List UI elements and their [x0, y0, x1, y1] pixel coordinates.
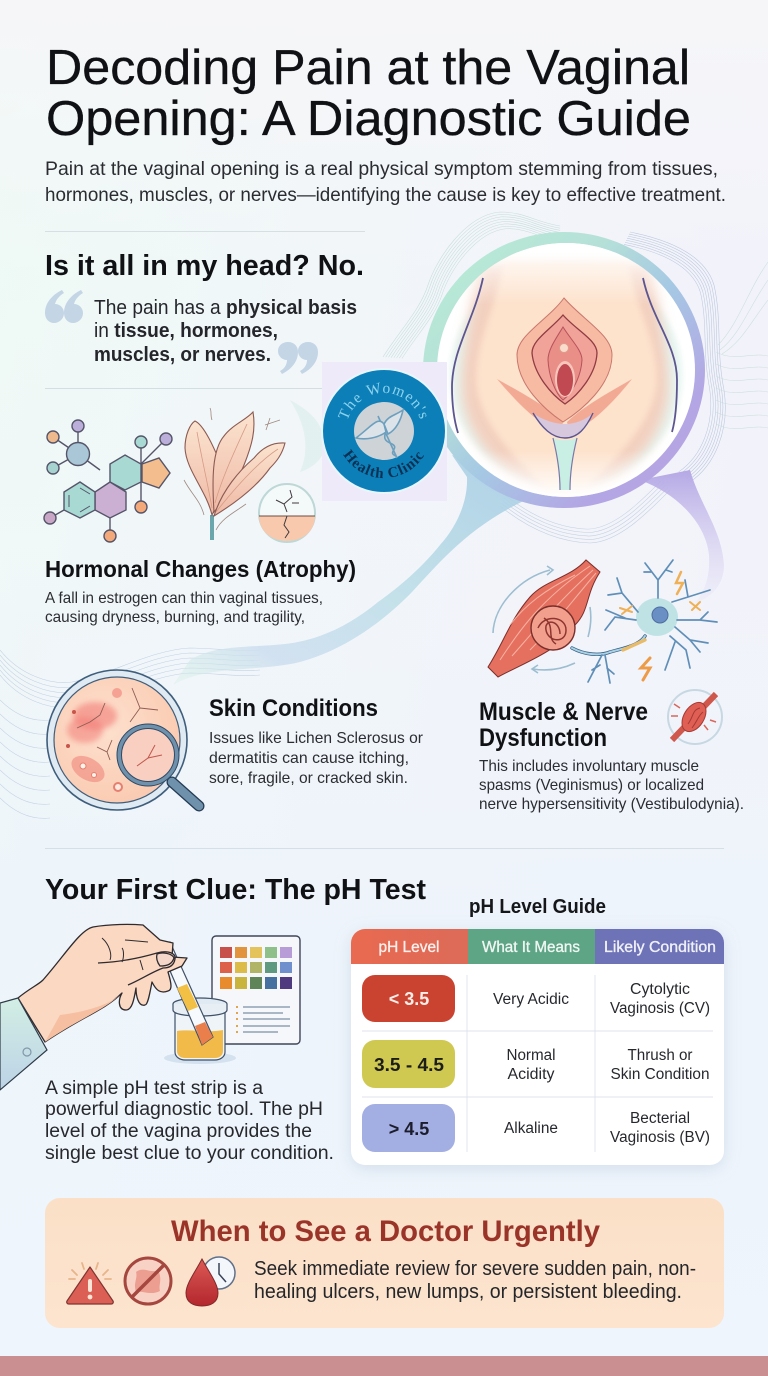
table header: What It Means: [482, 939, 580, 956]
row: below 3.5: Cytolytic: [630, 981, 690, 998]
row: 3.5 to 4.5: Skin Condition: [610, 1066, 710, 1083]
description: Issues like Lichen Sclerosus or: [209, 730, 424, 747]
row: 3.5 to 4.5: 3.5 - 4.5: [374, 1055, 444, 1075]
intro text: [45, 158, 726, 206]
logo wordmark: [338, 382, 426, 478]
icon: colour reference chart: [212, 936, 300, 1044]
description: nerve hypersensitivity (Vestibulodynia).: [479, 796, 744, 813]
description: [479, 758, 744, 813]
icon: shirt cuff: [0, 998, 47, 1090]
row: below 3.5: Vaginosis (CV): [610, 1000, 710, 1017]
title: Opening: A Diagnostic Guide: [46, 92, 691, 146]
description: [45, 590, 323, 626]
heading: [479, 698, 648, 752]
icon: wilted flower: [184, 408, 285, 540]
ph description: powerful diagnostic tool. The pH: [45, 1099, 323, 1120]
quote block: [45, 290, 357, 374]
description: dermatitis can cause itching,: [209, 750, 409, 767]
skin conditions panel: [47, 670, 424, 810]
row: 3.5 to 4.5: [362, 1040, 710, 1088]
heading: Hormonal Changes (Atrophy): [45, 556, 356, 582]
intro text: hormones, muscles, or nerves—identifying the cause is key to effective treatment.: [45, 184, 726, 206]
intro text: Pain at the vaginal opening is a real physical symptom stemming from tissues,: [45, 158, 718, 180]
ph description: single best clue to your condition.: [45, 1143, 334, 1164]
heading: is it all in my head: Is it all in my head? No.: [45, 250, 364, 282]
row: 3.5 to 4.5: Normal: [506, 1047, 556, 1064]
row: below 3.5: [362, 975, 710, 1022]
title: Decoding Pain at the Vaginal: [46, 41, 690, 95]
heading: Skin Conditions: [209, 695, 378, 722]
row: below 3.5: Very Acidic: [493, 991, 569, 1008]
callout text: Seek immediate review for severe sudden pain, non-: [254, 1258, 696, 1280]
row: above 4.5: Alkaline: [504, 1120, 558, 1137]
footer bar: [0, 1356, 768, 1376]
flowing contour lines: [0, 212, 768, 818]
heading: ph test: Your First Clue: The pH Test: [45, 874, 426, 906]
callout heading: When to See a Doctor Urgently: [171, 1215, 600, 1248]
heading: Muscle & Nerve: [479, 698, 648, 726]
table header: [351, 929, 724, 964]
ph table title: pH Level Guide: [469, 896, 606, 918]
callout text: [254, 1258, 696, 1303]
description: This includes involuntary muscle: [479, 758, 699, 775]
illustration: ph test: [0, 924, 300, 1090]
icon: opening quotation mark: [45, 290, 83, 323]
title: [46, 41, 691, 146]
ph description: level of the vagina provides the: [45, 1121, 312, 1142]
ph description: [45, 1078, 334, 1164]
icon: warning triangle: [67, 1263, 113, 1304]
description: [209, 730, 424, 787]
description: causing dryness, burning, and tragility,: [45, 609, 305, 626]
description: sore, fragile, or cracked skin.: [209, 770, 408, 787]
icon: muscle knot badge: [668, 690, 722, 744]
icon: neuron: [572, 560, 717, 683]
row: above 4.5: Vaginosis (BV): [610, 1129, 710, 1146]
ph description: A simple pH test strip is a: [45, 1078, 263, 1099]
icon: closing quotation mark: [278, 342, 318, 374]
description: A fall in estrogen can thin vaginal tissues,: [45, 590, 323, 607]
quote text: in tissue, hormones,: [94, 320, 278, 342]
quote text: muscles, or nerves.: [94, 344, 271, 366]
row: above 4.5: > 4.5: [389, 1119, 429, 1139]
anatomical diagram in circle: [423, 232, 705, 508]
icon: hand holding strip: [18, 924, 187, 1042]
table header: pH Level: [378, 939, 440, 956]
heading: Dysfunction: [479, 724, 607, 752]
muscle and nerve panel: [479, 560, 744, 813]
icon: blood drop and clock: [186, 1257, 235, 1306]
logo wordmark: The Women's: [338, 382, 426, 419]
hormonal changes panel: [44, 408, 356, 626]
icon: no broken skin: [125, 1258, 171, 1304]
clinic logo: [321, 362, 447, 501]
icon: sample jar and strip: [158, 942, 236, 1064]
callout text: healing ulcers, new lumps, or persistent bleeding.: [254, 1281, 682, 1303]
ph level table: [351, 929, 724, 1165]
row: 3.5 to 4.5: Thrush or: [628, 1047, 692, 1064]
row: above 4.5: [362, 1104, 710, 1152]
row: 3.5 to 4.5: Acidity: [508, 1066, 555, 1083]
table header: Likely Condition: [604, 939, 716, 956]
quote text: [94, 297, 357, 366]
icon: caduceus: [356, 410, 403, 458]
row: below 3.5: < 3.5: [389, 989, 429, 1009]
quote text: The pain has a physical basis: [94, 297, 357, 319]
icon: knotted muscle: [488, 560, 600, 677]
icon: skin under magnifier: [47, 670, 199, 810]
description: spasms (Veginismus) or localized: [479, 777, 704, 794]
logo wordmark: Health Clinic: [343, 448, 424, 478]
row: above 4.5: Becterial: [630, 1110, 690, 1127]
icon: hormone molecule: [44, 420, 172, 542]
panel: urgent care callout: [45, 1198, 724, 1328]
connecting ribbons: [173, 400, 724, 685]
icon: cracked tissue: [259, 484, 315, 542]
